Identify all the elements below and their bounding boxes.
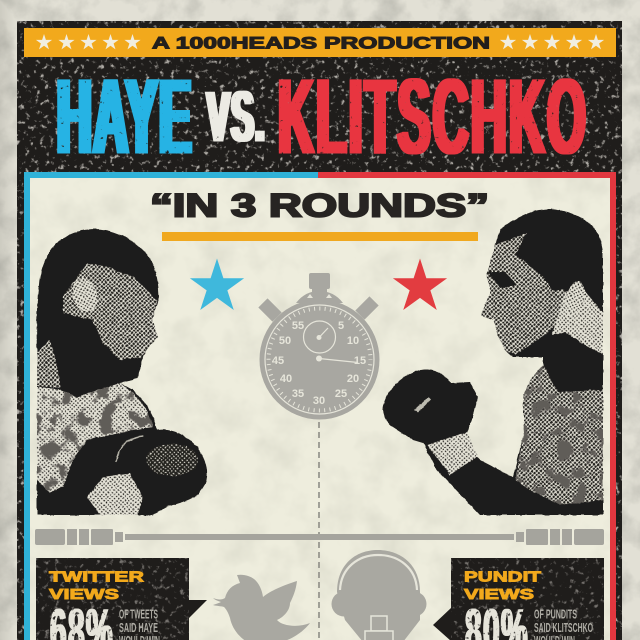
heading: pundit views xyxy=(464,568,541,603)
torso mottling xyxy=(515,365,605,505)
centre dashed line xyxy=(318,422,320,640)
banner text: A 1000HEADS PRODUCTION xyxy=(152,34,490,52)
icon: stopwatch: 35 xyxy=(292,388,304,400)
upper back xyxy=(37,340,60,388)
icon: headset xyxy=(332,550,426,640)
star: red xyxy=(393,258,447,310)
icon: twitter bird xyxy=(213,575,310,640)
heading: in 3 rounds: “IN 3 ROUNDS” xyxy=(150,188,489,224)
stat caption: OF TWEETS xyxy=(119,606,158,622)
ear xyxy=(562,279,588,317)
heading: twitter views: VIEWS xyxy=(49,586,119,603)
panel: twitter views xyxy=(36,558,207,640)
icon: stopwatch: 15 xyxy=(354,355,366,367)
stars right xyxy=(500,34,604,49)
banner: a 1000heads production xyxy=(24,28,616,57)
glove highlight xyxy=(414,397,431,413)
hand wrap xyxy=(87,473,143,515)
glove lace xyxy=(427,432,478,475)
shoulder mottling xyxy=(36,386,153,492)
shoulder xyxy=(37,383,153,493)
face xyxy=(63,263,158,360)
icon: stopwatch: 20 xyxy=(347,373,359,385)
stat caption: SAID HAYE xyxy=(119,620,158,635)
icon: stopwatch xyxy=(258,273,380,420)
icon: stopwatch: 55 xyxy=(292,320,304,332)
icon: stopwatch: 50 xyxy=(279,335,291,347)
timeline bar xyxy=(35,529,604,545)
orange divider xyxy=(162,232,478,241)
main panel xyxy=(24,172,616,640)
title: haye vs klitschko xyxy=(57,56,588,176)
stat caption: OF PUNDITS xyxy=(534,606,577,622)
heading: pundit views: PUNDIT xyxy=(464,568,541,586)
icon: stopwatch: 10 xyxy=(347,335,359,347)
icon: stopwatch: 45 xyxy=(272,355,284,367)
stat caption xyxy=(119,606,160,640)
neck xyxy=(552,285,603,355)
heading: twitter views: TWITTER xyxy=(49,568,144,586)
heading: pundit views: VIEWS xyxy=(464,586,534,603)
stars left xyxy=(36,34,141,49)
panel: pundit views xyxy=(433,558,604,640)
icon: stopwatch: 25 xyxy=(335,388,347,400)
icon: stopwatch: 40 xyxy=(280,373,292,385)
glove highlight xyxy=(146,444,198,476)
torso xyxy=(515,365,603,505)
boxer: haye xyxy=(37,229,207,515)
title: haye vs klitschko: VS. xyxy=(207,78,266,158)
ear xyxy=(69,275,101,315)
boxer: klitschko xyxy=(383,209,605,515)
stat caption xyxy=(534,606,593,640)
heading: twitter views xyxy=(49,568,144,603)
star: blue xyxy=(190,258,244,310)
eye brow xyxy=(488,272,517,288)
icon: stopwatch: 30 xyxy=(313,395,325,407)
glove seam xyxy=(116,436,143,462)
beard xyxy=(62,320,140,395)
title: haye vs klitschko: HAYE xyxy=(57,56,193,176)
icon: stopwatch: 5 xyxy=(338,320,344,332)
face xyxy=(481,233,565,355)
